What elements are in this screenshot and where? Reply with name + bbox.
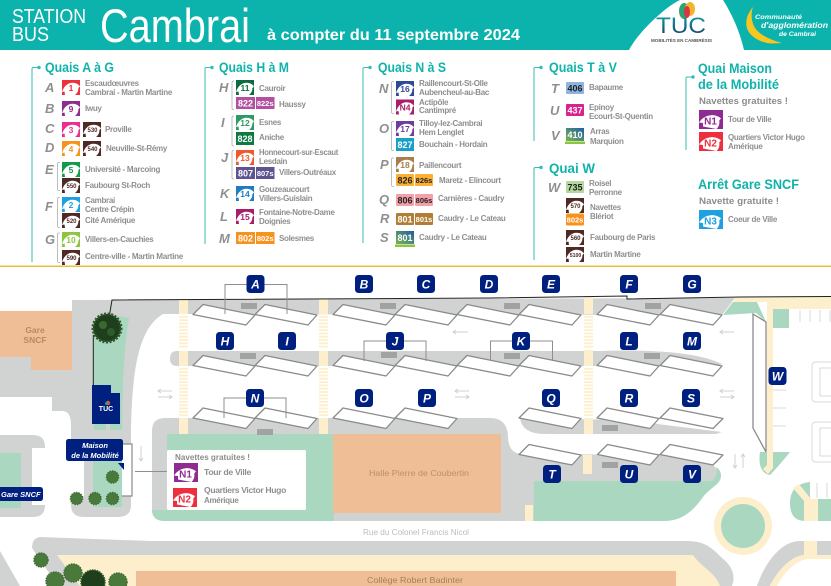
- row L: L: [220, 209, 228, 224]
- row V: [551, 127, 624, 146]
- row B: 9: [69, 104, 74, 114]
- map panel row N2: Amérique: [204, 496, 239, 505]
- row E: Université - Marcoing: [85, 165, 160, 174]
- row I: 12: [240, 118, 250, 128]
- quay label J: J: [392, 334, 399, 348]
- row N3: N3: [704, 216, 717, 228]
- row I: 828: [237, 134, 253, 144]
- row P: 826s: [416, 176, 432, 185]
- row: martin martine: [566, 247, 641, 262]
- heading: quai maison: Quai Maison: [698, 61, 772, 76]
- row J: Villers-Outréaux: [279, 168, 337, 177]
- row U: Ecourt-St-Quentin: [589, 112, 653, 121]
- quay label A: [246, 275, 264, 293]
- right-hand parking lines: [773, 310, 831, 498]
- row Q: [379, 192, 505, 207]
- quay label W: W: [772, 370, 785, 384]
- quay label H: H: [221, 334, 230, 348]
- quay connectors: [135, 284, 552, 472]
- subheading: navette gratuite: Navette gratuite !: [699, 196, 779, 207]
- row Q: 806s: [416, 196, 432, 205]
- row K: K: [220, 186, 231, 201]
- quay label W: [768, 367, 786, 385]
- TUC logo: MOBILITÉS EN CAMBRÉSIS: [651, 38, 712, 43]
- building: gare SNCF: SNCF: [23, 335, 47, 345]
- row K: Gouzeaucourt: [259, 185, 310, 194]
- panel: arrêt gare SNCF: [698, 177, 799, 229]
- row D: D: [45, 140, 55, 155]
- quay label T: [543, 465, 561, 483]
- row S: 801: [397, 233, 413, 243]
- label: gare SNCF: Gare SNCF: [1, 490, 41, 499]
- traffic arrows: [139, 330, 745, 468]
- row: navettes blériot: 802s: [567, 216, 583, 224]
- quays row 4: [519, 444, 723, 465]
- subheading: navettes gratuites: Navettes gratuites !: [699, 96, 788, 107]
- row L: 15: [240, 212, 250, 222]
- row C: C: [45, 121, 55, 136]
- row A: 1: [69, 83, 74, 93]
- row O: Bouchain - Hordain: [419, 140, 488, 149]
- row N: Raillencourt-St-Olle: [419, 79, 489, 88]
- quay label R: [620, 389, 638, 407]
- quay W outline: [753, 314, 766, 452]
- quay label B: [355, 275, 373, 293]
- trees near maison de la mobilité: [70, 471, 118, 504]
- header: bus word: BUS: [12, 24, 49, 46]
- agglomeration logo: Communauté: [755, 14, 802, 21]
- row G: Villers-en-Cauchies: [85, 235, 154, 244]
- panel: quais N à S: [363, 60, 506, 247]
- map: ground areas: [0, 297, 831, 586]
- row H: 11: [240, 83, 250, 93]
- row T: 406: [567, 84, 583, 94]
- row H: Haussy: [279, 100, 307, 109]
- row B: B: [45, 101, 54, 116]
- row A: [44, 79, 173, 97]
- quay label S: [682, 389, 700, 407]
- subtitle: date: à compter du 11 septembre 2024: [267, 27, 520, 44]
- row F: 520: [66, 219, 77, 225]
- row: navettes blériot: Navettes: [590, 203, 622, 212]
- quay label O: [355, 389, 373, 407]
- row R: R: [380, 211, 390, 226]
- quay label D: D: [485, 278, 494, 292]
- map panel row N2: [173, 486, 286, 507]
- row: martin martine: Martin Martine: [590, 250, 641, 259]
- row S: [380, 230, 487, 247]
- row U: [550, 103, 653, 121]
- row O: Hem Lenglet: [419, 128, 464, 137]
- quay label P: [418, 389, 436, 407]
- row N: [379, 79, 490, 115]
- row P: P: [380, 157, 389, 172]
- quay label N: N: [251, 392, 260, 406]
- row N3: [699, 210, 778, 229]
- building: gare SNCF: [0, 311, 72, 370]
- row P: Paillencourt: [419, 161, 462, 170]
- row W: W: [548, 180, 562, 195]
- row U: 437: [567, 106, 583, 116]
- row M: 802: [238, 234, 253, 244]
- row N: Actipôle: [419, 98, 449, 107]
- row L: Fontaine-Notre-Dame: [259, 208, 335, 217]
- quay label N: [246, 389, 264, 407]
- quay label G: G: [687, 278, 697, 292]
- row G: G: [45, 232, 55, 247]
- row H: H: [219, 80, 229, 95]
- quay label U: U: [625, 468, 634, 482]
- row R: 801: [397, 214, 413, 224]
- row U: U: [550, 103, 560, 118]
- row N1: N1: [704, 116, 717, 128]
- panel: quais A à G: [32, 60, 184, 265]
- heading: arrêt gare SNCF: Arrêt Gare SNCF: [698, 177, 799, 192]
- quay label L: L: [625, 334, 633, 348]
- row N: N4: [400, 102, 411, 112]
- quay label G: [683, 275, 701, 293]
- heading: quais N à S: Quais N à S: [378, 60, 446, 75]
- row I: Aniche: [259, 133, 285, 142]
- row E: Faubourg St-Roch: [85, 181, 150, 190]
- row J: J: [221, 150, 229, 165]
- heading: de la mobilité: de la Mobilité: [698, 77, 779, 92]
- map panel row N1: N1: [179, 470, 192, 480]
- row D: Neuville-St-Rémy: [106, 144, 168, 153]
- quay label Q: Q: [546, 392, 556, 406]
- row F: Centre Crépin: [85, 205, 134, 214]
- agglomeration logo: de Cambrai: [779, 31, 816, 38]
- label: rue du colonel francis nicol: Rue du Colonel Francis Nicol: [363, 528, 469, 537]
- row S: Caudry - Le Cateau: [419, 233, 487, 242]
- agglomeration logo: d'agglomération: [761, 21, 828, 30]
- trees at bottom left: [34, 553, 127, 586]
- row: martin martine: 5100: [570, 253, 581, 259]
- row H: 822: [238, 98, 253, 108]
- row P: [380, 157, 501, 186]
- quay label B: B: [360, 278, 369, 292]
- panel: quais T à V: [534, 60, 653, 146]
- building: halle pierre de coubertin: [333, 434, 501, 513]
- quay label T: T: [548, 468, 557, 482]
- heading: quais H à M: Quais H à M: [219, 60, 289, 75]
- row N2: Quartiers Victor Hugo: [728, 133, 805, 142]
- row W: 735: [567, 182, 583, 192]
- row F: Cité Amérique: [85, 216, 136, 225]
- map panel heading: Navettes gratuites !: [175, 453, 250, 462]
- quay label E: [542, 275, 560, 293]
- quays row 3: [193, 408, 723, 428]
- row M: Solesmes: [279, 234, 315, 243]
- row E: 550: [66, 184, 77, 190]
- panel: quai maison de la mobilité: [686, 61, 805, 151]
- header band: [0, 0, 831, 52]
- row W: [548, 179, 623, 197]
- building: TUC: [92, 385, 120, 424]
- row Q: Carnières - Caudry: [438, 194, 505, 203]
- label: maison de la mobilité: Maison: [82, 441, 108, 450]
- row F: [45, 196, 136, 228]
- row Q: 806: [397, 196, 413, 206]
- row O: 17: [400, 124, 410, 134]
- row C: Proville: [105, 125, 132, 134]
- quay label I: [278, 332, 296, 350]
- quays row 1: [193, 304, 722, 325]
- building: gare SNCF: Gare: [25, 325, 45, 335]
- row I: Esnes: [259, 118, 282, 127]
- row T: [551, 81, 624, 96]
- quay label H: [216, 332, 234, 350]
- station map: [0, 275, 831, 586]
- row V: 410: [567, 130, 583, 140]
- quay label M: [683, 332, 701, 350]
- row E: [45, 162, 160, 193]
- row S: S: [380, 230, 389, 245]
- panel: navettes gratuites on map: [167, 450, 306, 510]
- row G: 590: [66, 256, 77, 262]
- row J: 807s: [257, 169, 274, 178]
- map panel row N2: Quartiers Victor Hugo: [204, 486, 286, 495]
- row W: Roisel: [589, 179, 611, 188]
- row E: 5: [69, 165, 74, 175]
- row D: 540: [87, 147, 98, 153]
- row F: 2: [69, 200, 74, 210]
- quay label P: P: [423, 392, 432, 406]
- row N2: N2: [704, 138, 717, 150]
- quay label L: [620, 332, 638, 350]
- quay label D: [480, 275, 498, 293]
- label: maison de la mobilité: [66, 439, 124, 470]
- panel: quai W: [534, 161, 656, 262]
- row D: 4: [69, 144, 74, 154]
- row M: 802s: [257, 234, 274, 243]
- row L: [220, 208, 335, 226]
- row N: 16: [400, 84, 410, 94]
- row G: Centre-ville - Martin Martine: [85, 252, 184, 261]
- quay label A: A: [250, 278, 260, 292]
- quay label Q: [542, 389, 560, 407]
- map panel row N1: Tour de Ville: [204, 468, 252, 477]
- title: Cambrai: Cambrai: [100, 0, 250, 52]
- quay maison outline: [122, 444, 132, 496]
- row P: 826: [397, 176, 413, 186]
- boundary line: [93, 296, 831, 385]
- row J: Lesdain: [259, 157, 288, 166]
- row R: Caudry - Le Cateau: [438, 214, 506, 223]
- tree: large by TUC: [93, 314, 121, 342]
- row N2: Amérique: [728, 142, 763, 151]
- row I: I: [221, 115, 225, 130]
- quay label R: R: [625, 392, 634, 406]
- quay label J: [386, 332, 404, 350]
- row N: N: [379, 81, 389, 96]
- map divider: [0, 266, 831, 267]
- row B: Iwuy: [85, 104, 102, 113]
- quay label K: [512, 332, 530, 350]
- row K: 14: [240, 189, 250, 199]
- row P: 18: [400, 160, 410, 170]
- row E: E: [45, 162, 54, 177]
- building: halle pierre de coubertin: Halle Pierre de Coubertin: [369, 469, 469, 478]
- row K: Villers-Guislain: [259, 194, 313, 203]
- quay label F: F: [625, 278, 633, 292]
- quay label C: [417, 275, 435, 293]
- row D: [45, 140, 168, 156]
- row: faubourg de paris: [566, 230, 656, 245]
- TUC logo: TUC: [656, 13, 706, 38]
- agglomeration logo: [746, 7, 828, 43]
- row C: 530: [87, 128, 98, 134]
- row R: 801s: [416, 215, 432, 224]
- row H: [219, 80, 307, 110]
- row: faubourg de paris: Faubourg de Paris: [590, 233, 656, 242]
- row L: Doignies: [259, 217, 291, 226]
- row G: [45, 232, 184, 265]
- row G: 10: [66, 235, 76, 245]
- map panel row N1: [174, 463, 252, 482]
- map panel row N2: N2: [178, 494, 191, 506]
- row O: Tilloy-lez-Cambrai: [419, 119, 482, 128]
- row C: [45, 121, 132, 137]
- row O: 827: [397, 140, 413, 150]
- row F: F: [45, 199, 54, 214]
- building: TUC: TUC: [99, 406, 113, 413]
- row H: 822s: [257, 99, 274, 108]
- row O: [379, 119, 488, 151]
- row N1: Tour de Ville: [728, 115, 772, 124]
- row U: Epinoy: [589, 103, 615, 112]
- row K: [220, 185, 313, 203]
- row B: [45, 101, 102, 116]
- row T: Bapaume: [589, 83, 624, 92]
- row C: 3: [69, 125, 74, 135]
- row N2: [699, 132, 805, 151]
- row I: [221, 115, 285, 146]
- row J: 807: [238, 168, 253, 178]
- quay label F: [620, 275, 638, 293]
- quay label V: V: [688, 468, 697, 482]
- row A: Cambrai - Martin Martine: [85, 88, 173, 97]
- row N3: Coeur de Ville: [728, 215, 778, 224]
- row A: Escaudœuvres: [85, 79, 140, 88]
- quay label I: I: [285, 334, 289, 348]
- row: navettes blériot: [566, 198, 622, 226]
- quay label C: C: [422, 278, 431, 292]
- heading: quais T à V: Quais T à V: [549, 60, 617, 75]
- TUC logo: [629, 0, 744, 50]
- heading: quai W: Quai W: [549, 161, 595, 176]
- row J: Honnecourt-sur-Escaut: [259, 148, 339, 157]
- row R: [380, 211, 506, 226]
- header: station bus label: STATION: [12, 6, 86, 28]
- quay label S: S: [687, 392, 695, 406]
- quay label E: E: [547, 278, 556, 292]
- row F: Cambrai: [85, 196, 115, 205]
- row V: Arras: [590, 127, 610, 136]
- row W: Perronne: [589, 188, 623, 197]
- row Q: Q: [379, 192, 389, 207]
- platform shelters: [240, 303, 661, 468]
- pedestrian crossings: [179, 297, 593, 521]
- row O: O: [379, 121, 389, 136]
- row: navettes blériot: Blériot: [590, 212, 614, 221]
- row J: [221, 148, 339, 179]
- row N: Cantimpré: [419, 106, 457, 115]
- row M: M: [219, 231, 231, 246]
- row J: 13: [240, 153, 250, 163]
- quay label V: [683, 465, 701, 483]
- quay label O: O: [359, 392, 369, 406]
- label: maison de la mobilité: de la Mobilité: [71, 451, 119, 460]
- quay label U: [620, 465, 638, 483]
- row T: T: [551, 81, 560, 96]
- label: collège robert badinter: Collège Robert Badinter: [367, 575, 463, 585]
- quays row 2: [193, 356, 722, 376]
- row P: Maretz - Elincourt: [439, 176, 501, 185]
- row: navettes blériot: 570: [570, 204, 581, 210]
- row V: Marquion: [590, 137, 624, 146]
- panel: quais H à M: [205, 60, 339, 246]
- row: faubourg de paris: 560: [570, 236, 581, 242]
- row H: Cauroir: [259, 84, 286, 93]
- label: gare SNCF: [0, 487, 43, 501]
- quay label K: K: [517, 334, 527, 348]
- row M: [219, 231, 315, 246]
- row V: V: [551, 128, 561, 143]
- row N: Aubencheul-au-Bac: [419, 88, 490, 97]
- row N1: [699, 110, 772, 129]
- row A: A: [44, 80, 54, 95]
- quay label M: M: [687, 334, 698, 348]
- heading: quais A à G: Quais A à G: [45, 60, 114, 75]
